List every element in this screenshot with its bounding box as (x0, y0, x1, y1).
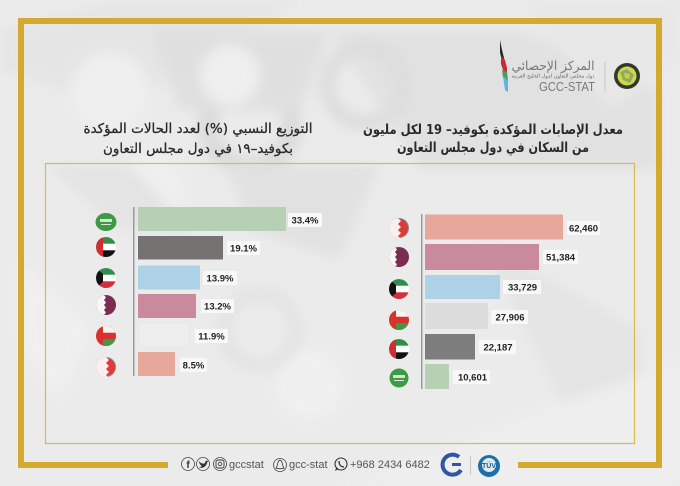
bar chart: confirmed share by country (133, 207, 322, 376)
title: right chart: معدل الإصابات المؤكدة بكوفيد– 19 لكل مليون (363, 122, 623, 138)
flags: left chart (96, 213, 116, 377)
bar: Qatar 51,384: 51,384 (546, 252, 576, 264)
bar: Oman 27,906 (425, 303, 528, 329)
flag: Saudi Arabia (390, 368, 408, 388)
bar: Oman 11.9%: 11.9% (198, 332, 225, 342)
icon: whatsapp (335, 458, 347, 471)
inner gold frame (46, 164, 634, 444)
bar: Kuwait 13.9%: 13.9% (207, 274, 234, 284)
bar: Saudi Arabia 33.4%: 33.4% (292, 216, 319, 226)
flag: Qatar (389, 247, 409, 267)
footer: contact bar (182, 455, 500, 477)
bar: Qatar 13.2% (138, 294, 234, 318)
icon: snapchat (274, 458, 286, 472)
bar: Bahrain 8.5%: 8.5% (183, 360, 205, 372)
flags: right chart (389, 218, 409, 388)
bar: Oman 11.9% (138, 322, 228, 348)
logo: GCC-STAT (500, 40, 606, 94)
logo ribbon (500, 40, 508, 92)
title: right chart (363, 122, 623, 156)
flag: UAE (389, 339, 409, 359)
handle: gccstat: gccstat (229, 459, 264, 471)
icon: facebook: f (186, 460, 190, 471)
flag: Kuwait (96, 268, 116, 288)
logo arabic name: المركز الإحصائي (512, 58, 594, 74)
bar: UAE 19.1% (138, 236, 260, 260)
logo latin name: GCC-STAT (539, 80, 595, 94)
bar: Saudi Arabia 33.4% (138, 207, 322, 231)
flag: UAE (96, 237, 116, 257)
handle: gcc-stat: gcc-stat (289, 459, 328, 471)
icon: instagram (214, 458, 226, 470)
flag: Oman (96, 326, 116, 346)
logo subtitle: دول مجلس التعاون لدول الخليج العربية (512, 74, 594, 80)
phone number: +968 2434 6482 (350, 459, 430, 471)
bar: Kuwait 13.9% (138, 266, 237, 290)
bar: Bahrain 8.5% (138, 352, 207, 376)
icon: facebook (182, 458, 194, 471)
bar: Saudi Arabia 10,601 (425, 364, 490, 389)
icon: twitter (196, 458, 210, 470)
flag: Kuwait (389, 279, 409, 299)
flag: Bahrain (96, 357, 116, 377)
flag: Oman (389, 310, 409, 330)
title: left chart: بكوفيد–١٩ في دول مجلس التعاون (103, 141, 293, 157)
icon: TUV badge: TÜV (482, 461, 496, 470)
title: left chart (84, 121, 312, 157)
title: right chart: من السكان في دول مجلس التعاون (397, 140, 589, 156)
icon: GCC emblem (614, 63, 640, 89)
flag: Saudi Arabia (96, 213, 116, 231)
axis (421, 214, 422, 389)
bar: Kuwait 33,729: 33,729 (508, 282, 537, 294)
bar: Qatar 51,384 (425, 244, 578, 270)
title: left chart: التوزيع النسبي (%) لعدد الحالات المؤكدة (84, 121, 312, 137)
icon: TUV badge (478, 455, 500, 477)
bar: Saudi Arabia 10,601: 10,601 (458, 372, 488, 384)
bar: Oman 27,906: 27,906 (495, 312, 525, 324)
icon: G quality mark (443, 455, 461, 475)
bar: Bahrain 62,460 (425, 214, 600, 240)
axis (133, 207, 134, 376)
bar: UAE 22,187 (425, 334, 516, 360)
bar: UAE 19.1%: 19.1% (230, 244, 258, 254)
bar: UAE 22,187: 22,187 (483, 342, 513, 354)
bar: Qatar 13.2%: 13.2% (204, 302, 232, 312)
flag: Bahrain (389, 218, 409, 238)
bar: Kuwait 33,729 (425, 275, 541, 299)
bar chart: confirmed cases per million (421, 214, 600, 389)
flag: Qatar (96, 295, 116, 315)
bar: Bahrain 62,460: 62,460 (569, 224, 598, 234)
